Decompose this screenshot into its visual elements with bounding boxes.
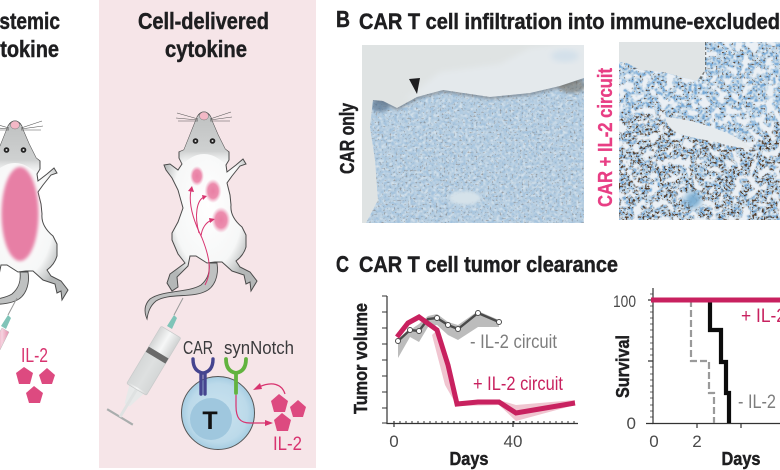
- x axis title: Days: [722, 449, 760, 469]
- icon: IL-2 pentagons left: [16, 367, 55, 403]
- label: IL-2 systemic: IL-2: [21, 345, 48, 367]
- T cell body: [182, 376, 254, 450]
- pink error band: [432, 330, 575, 421]
- y axis numbers: 100: [613, 292, 636, 311]
- panel: cell-delivered cytokine background: [99, 0, 316, 468]
- label: plus IL-2 circuit: + IL-2 circuit: [473, 374, 564, 395]
- panel label C: C: [336, 251, 349, 277]
- series: plus IL-2 circuit: [397, 317, 575, 413]
- series: plus IL-2: [651, 298, 780, 302]
- panel label B: B: [336, 6, 350, 32]
- heading: CAR T cell tumor clearance: CAR T cell tumor clearance: [359, 252, 618, 277]
- arrowhead marker: [409, 78, 420, 94]
- synNotch receptor: [226, 359, 246, 393]
- heading: systemic cytokine: [0, 8, 60, 62]
- x axis numbers: 2: [692, 432, 702, 451]
- series: minus IL-2: [710, 300, 729, 423]
- illustration: syringe: [107, 298, 184, 426]
- CAR receptor: [193, 359, 213, 394]
- y axis title: Tumor volume: [350, 303, 371, 414]
- heading: cell-delivered cytokine: [138, 8, 269, 62]
- illustration: mouse with systemic cytokine: [0, 121, 68, 350]
- chart: survival step chart: [612, 288, 780, 469]
- T cell nucleus: [190, 398, 232, 440]
- x axis numbers: [649, 432, 702, 451]
- y axis numbers: 0: [627, 414, 636, 433]
- image: CAR only micrograph: [362, 40, 590, 226]
- arrow: IL-2 output: [236, 395, 268, 423]
- label: minus IL-2 circuit: - IL-2 circuit: [470, 332, 558, 353]
- y axis numbers: [613, 292, 636, 433]
- CAR label: CAR: [183, 337, 213, 358]
- label: CAR only: CAR only: [336, 103, 359, 174]
- x axis numbers: 0: [649, 432, 659, 451]
- x axis numbers: [389, 432, 522, 451]
- x axis numbers: 40: [504, 432, 522, 451]
- x axis title: Days: [450, 449, 488, 469]
- icon: IL-2 pentagons right: [271, 394, 306, 431]
- series: minus IL-2 circuit: [396, 310, 502, 344]
- y axis title: Survival: [612, 335, 633, 398]
- heading: cell-delivered cytokine: cytokine: [165, 36, 247, 62]
- diagram: T cell with receptors: [182, 337, 306, 455]
- axes: [382, 296, 578, 427]
- heading: cell-delivered cytokine: Cell-delivered: [138, 8, 269, 34]
- x axis numbers: 0: [389, 432, 399, 451]
- axes: [646, 288, 780, 428]
- nucleus label: T: [202, 407, 218, 435]
- arrow: IL-2 feedback: [259, 384, 285, 394]
- chart: tumor volume line chart: [350, 296, 578, 469]
- label: IL-2: IL-2: [273, 434, 302, 455]
- gray error band: [398, 311, 499, 358]
- image: CAR + IL-2 circuit micrograph: [617, 40, 780, 222]
- label: CAR + IL-2 circuit: CAR + IL-2 circuit: [595, 68, 617, 207]
- synNotch label: synNotch: [224, 337, 294, 358]
- series: control dashed: [691, 300, 714, 423]
- illustration: mouse with engineered cells: [145, 112, 257, 319]
